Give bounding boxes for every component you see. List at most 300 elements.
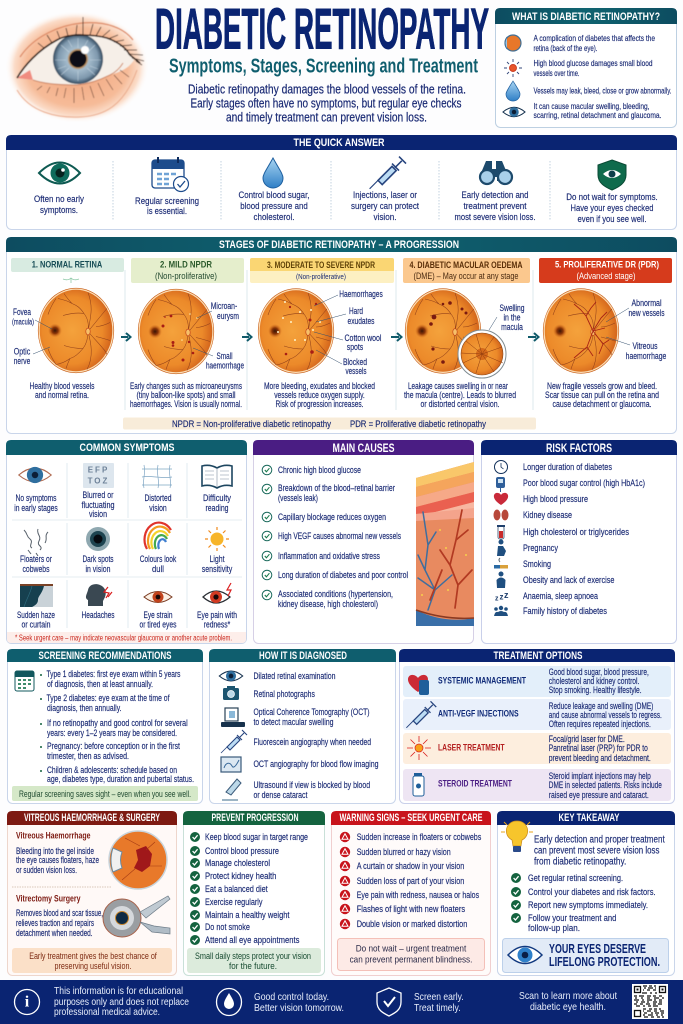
risk: pregnancy: Pregnancy <box>523 543 558 553</box>
symptom: blurred vision chart <box>82 463 115 519</box>
icon: drop <box>506 81 520 101</box>
takeaway checklist: Follow your treatment and <box>528 913 616 923</box>
panel: treatment options <box>399 649 675 804</box>
treatment: systemic management: cholesterol and kidney control. <box>549 676 639 686</box>
symptom: rainbow: dull <box>152 564 164 574</box>
urgent care note <box>7 632 246 643</box>
answer: early detection: most severe vision loss. <box>454 212 536 222</box>
warning callout <box>338 938 484 970</box>
answer: injections <box>351 157 419 222</box>
stage 3: moderate to severe NPDR: Blocked <box>343 357 367 367</box>
panel heading: SCREENING RECOMMENDATIONS <box>38 650 172 662</box>
diagnosis: dilated exam <box>219 671 336 681</box>
screening list: If no retinopathy and good control for several <box>47 718 188 728</box>
symptom: curtain <box>17 584 55 630</box>
panel: risk factors <box>481 440 677 644</box>
symptom: distorted vision grid: Distorted <box>144 493 172 503</box>
risk: family: Family history of diabetes <box>523 606 607 616</box>
answer: control blood sugar: cholesterol. <box>254 212 294 222</box>
warning callout: Do not wait – urgent treatment <box>356 944 467 954</box>
risk: heart <box>494 493 588 505</box>
takeaway checklist: Get regular retinal screening. <box>528 873 623 883</box>
panel: what is diabetic retinopathy <box>495 8 677 128</box>
stage 4: diabetic macular oedema: in the <box>504 312 521 322</box>
causes list: Long duration of diabetes and poor control <box>278 570 408 580</box>
treatment: systemic management <box>403 666 671 697</box>
symptom: light sensitivity sun: Light <box>210 554 225 564</box>
symptom: eye strain: or tired eyes <box>140 620 177 630</box>
glucose text: High blood glucose damages small blood <box>534 58 653 68</box>
prevention checklist: Exercise regularly <box>205 897 263 907</box>
prevention checklist: Do not smoke <box>205 922 250 932</box>
answer: early detection <box>454 161 536 222</box>
panel heading: KEY TAKEAWAY <box>558 812 620 824</box>
stage 1: normal retina: Optic <box>14 346 31 356</box>
warning list <box>340 832 482 929</box>
stage 1: normal retina <box>11 258 124 400</box>
stage 5: proliferative DR <box>539 258 672 409</box>
vitreous callout: Early treatment gives the best chance of <box>29 951 157 961</box>
risk: sleep: z <box>495 596 499 602</box>
urgent care note: * Seek urgent care – may indicate neovascular glaucoma or another acute problem. <box>15 634 232 642</box>
disclaimer: professional medical advice. <box>54 1006 160 1018</box>
causes list: Chronic high blood glucose <box>278 465 361 475</box>
illustration: vitrectomy instruments <box>103 896 170 937</box>
symptom: rainbow <box>140 523 177 574</box>
causes list: Capillary blockage reduces oxygen <box>278 512 386 522</box>
vitreous callout: preserving useful vision. <box>54 961 132 971</box>
risk: sleep <box>495 590 598 602</box>
symptom: dark spots <box>82 527 114 574</box>
QR code <box>632 984 668 1019</box>
risk: smoking: Smoking <box>523 559 551 569</box>
warning list: Double vision or marked distortion <box>357 919 467 929</box>
stage 2: mild NPDR: haemorrhages. Vision is usually normal. <box>130 399 242 409</box>
screening list: trimester, then as advised. <box>47 751 129 761</box>
vitreous haemorrhage text: Bleeding into the gel inside <box>16 846 94 856</box>
stage 3: moderate to severe NPDR: More bleeding, exudates and blocked <box>264 381 375 391</box>
stage 3: moderate to severe NPDR: 3. MODERATE TO SEVERE NPDR <box>267 260 375 270</box>
stage 5: proliferative DR: (Advanced stage) <box>576 271 636 281</box>
treatment: anti-VEGF injections <box>403 699 671 730</box>
disclaimer: i <box>25 994 30 1010</box>
illustration: eye with haemorrhage <box>109 831 167 889</box>
arrow <box>121 333 130 341</box>
symptom: no symptoms: No symptoms <box>16 493 57 503</box>
symptom: curtain: Sudden haze <box>17 610 55 620</box>
answer: no early symptoms: Often no early <box>34 194 85 204</box>
treatment: laser: prevent bleeding and detachment. <box>549 753 651 763</box>
stage 4: diabetic macular oedema: macula <box>501 322 523 332</box>
definition text: retina (back of the eye). <box>534 43 598 53</box>
stage 4: diabetic macular oedema: Leakage causes swelling in or near <box>408 381 508 391</box>
prevention checklist: Eat a balanced diet <box>205 884 268 894</box>
treatment: steroid: raised eye pressure and cataract. <box>549 790 649 800</box>
panel: prevent progression <box>183 811 325 976</box>
warning list: Sudden blurred or hazy vision <box>357 847 451 857</box>
good control message: Better vision tomorrow. <box>254 1002 344 1014</box>
stage 3: moderate to severe NPDR: Hard <box>349 306 363 316</box>
symptom: dark spots: in vision <box>86 564 111 574</box>
risk: sleep: Anaemia, sleep apnoea <box>523 591 598 601</box>
warning list: Eye pain with redness, nausea or halos <box>357 890 480 900</box>
stage 1: normal retina: Fovea <box>13 307 31 317</box>
risk: kidneys: Kidney disease <box>523 510 572 520</box>
treatment: anti-VEGF injections: ANTI-VEGF INJECTIONS <box>438 708 519 720</box>
disclaimer: purposes only and does not replace <box>54 996 189 1008</box>
answer: injections: vision. <box>374 212 396 222</box>
vitrectomy text: relieves traction and repairs <box>16 918 94 928</box>
panel heading: STAGES OF DIABETIC RETINOPATHY – A PROGRESSION <box>219 239 459 251</box>
stage 2: mild NPDR: Early changes such as microaneurysms <box>130 381 242 391</box>
risk: blood sugar meter: Poor blood sugar control (high HbA1c) <box>523 478 645 488</box>
prevention checklist: Control blood pressure <box>205 846 279 856</box>
risk: family <box>494 606 607 616</box>
vitreous callout <box>12 948 172 973</box>
stage 5: proliferative DR: Vitreous <box>632 341 658 351</box>
answer: early detection: treatment prevent <box>464 201 527 211</box>
lifelong protection banner <box>502 938 668 972</box>
warning callout: can prevent permanent blindness. <box>350 954 472 966</box>
answer: regular screening <box>135 157 199 216</box>
panel heading: COMMON SYMPTOMS <box>80 442 174 454</box>
stage 1: normal retina: Healthy blood vessels <box>30 381 95 391</box>
symptom: blurred vision chart: fluctuating <box>82 500 115 510</box>
icon: calendar <box>15 671 34 691</box>
answer: control blood sugar: blood pressure and <box>240 201 308 211</box>
symptom: eye pain: redness* <box>204 620 231 630</box>
prevention checklist: Keep blood sugar in target range <box>205 832 308 842</box>
risk: pregnancy <box>497 540 558 556</box>
stage 3: moderate to severe NPDR: Risk of progression increases. <box>276 399 364 409</box>
prevention callout: for the future. <box>229 961 277 971</box>
symptom: floaters <box>20 529 52 574</box>
vitreous haemorrhage text: or sudden vision loss. <box>16 865 77 875</box>
treatment: systemic management: Stop smoking. Healthy lifestyle. <box>549 685 642 695</box>
intro paragraph: and timely treatment can prevent vision loss. <box>226 110 427 124</box>
warning list: A curtain or shadow in your vision <box>357 861 464 871</box>
stage 3: moderate to severe NPDR: vessels reduce oxygen supply. <box>274 390 365 400</box>
glucose text: vessels over time. <box>534 68 580 78</box>
panel heading: VITREOUS HAEMORRHAGE & SURGERY <box>24 812 160 824</box>
stage 4: diabetic macular oedema <box>403 258 530 409</box>
icon: eye cross-section <box>505 35 521 51</box>
symptom: distorted vision grid: vision <box>149 503 167 513</box>
diagnosis: fluorescein angiography: Fluorescein angiography when needed <box>254 737 371 747</box>
answer: no early symptoms <box>34 162 85 215</box>
warning list: Sudden loss of part of your vision <box>357 876 464 886</box>
answer: early detection: Early detection and <box>462 190 529 200</box>
risk: smoking <box>494 558 551 569</box>
treatment: systemic management: SYSTEMIC MANAGEMENT <box>438 676 526 686</box>
causes list: kidney disease, high cholesterol) <box>278 599 378 609</box>
answer: control blood sugar <box>238 158 310 222</box>
prevention checklist: Protect kidney health <box>205 871 276 881</box>
complications text <box>534 101 662 120</box>
symptom: difficulty reading book <box>202 465 232 513</box>
stage 4: diabetic macular oedema: (DME) – May occur at any stage <box>414 271 519 281</box>
panel heading: RISK FACTORS <box>546 441 612 455</box>
causes list: Associated conditions (hypertension, <box>278 589 393 599</box>
stage 4: diabetic macular oedema: 4. DIABETIC MACULAR OEDEMA <box>410 260 523 270</box>
symptom: dark spots: Dark spots <box>82 554 114 564</box>
screening list: of diagnosis, then at least annually. <box>47 679 153 689</box>
symptom: blurred vision chart: TOZ <box>88 476 109 486</box>
panel heading: THE QUICK ANSWER <box>294 137 385 149</box>
panel heading: MAIN CAUSES <box>332 441 394 455</box>
arrow <box>242 333 252 341</box>
symptom: headache <box>82 584 115 620</box>
symptom: eye pain: Eye pain with <box>197 610 237 620</box>
stage 1: normal retina: (macula) <box>12 318 34 326</box>
warning list: Sudden increase in floaters or cobwebs <box>357 832 482 842</box>
answer: regular screening: is essential. <box>147 206 187 216</box>
diagnosis: OCT angiography: OCT angiography for blood flow imaging <box>254 759 379 769</box>
abbreviation legend: NPDR = Non-proliferative diabetic retinopathy <box>172 419 331 429</box>
treatment: laser <box>403 733 671 764</box>
answer: no early symptoms: symptoms. <box>40 205 78 215</box>
diagnosis: OCT: Optical Coherence Tomography (OCT) <box>254 707 370 717</box>
takeaway checklist: Report new symptoms immediately. <box>528 900 648 910</box>
intro paragraph: Early stages often have no symptoms, but regular eye checks <box>190 96 462 110</box>
stage 4: diabetic macular oedema: or distorted central vision. <box>420 399 500 409</box>
prevention checklist: Maintain a healthy weight <box>205 910 290 920</box>
stage 2: mild NPDR: Microan- <box>211 301 237 311</box>
prevention callout <box>187 948 321 973</box>
stage 3: moderate to severe NPDR <box>250 258 394 409</box>
diagnosis: dilated exam: Dilated retinal examination <box>254 671 336 681</box>
symptom: blurred vision chart: Blurred or <box>82 490 114 500</box>
symptom: no symptoms: in early stages <box>14 503 58 513</box>
treatment: anti-VEGF injections: Often requires repeated injections. <box>549 719 651 729</box>
scan message: diabetic eye health. <box>530 1001 606 1013</box>
symptom: blurred vision chart: vision <box>89 509 107 519</box>
risk: kidneys <box>494 510 572 520</box>
answer: injections: surgery can protect <box>351 201 419 211</box>
causes list: High VEGF causes abnormal new vessels <box>278 531 401 541</box>
symptom: blurred vision chart: EFP <box>88 466 109 474</box>
treatment: laser: LASER TREATMENT <box>438 742 505 754</box>
prevention checklist: Attend all eye appointments <box>205 935 300 945</box>
icon: eye <box>503 107 525 117</box>
diagnosis: retinal photographs <box>223 686 315 700</box>
stage 1: normal retina: and normal retina. <box>35 390 89 400</box>
symptom: light sensitivity sun: sensitivity <box>202 564 233 574</box>
intro paragraph: Diabetic retinopathy damages the blood vessels of the retina. <box>188 82 466 96</box>
risk: duration clock: Longer duration of diabetes <box>523 462 612 472</box>
causes list: (vessels leak) <box>278 493 318 503</box>
answer: do not wait: Do not wait for symptoms. <box>566 192 658 202</box>
prevention checklist <box>190 832 308 945</box>
stage 3: moderate to severe NPDR: Cotton wool <box>344 333 382 343</box>
diagnosis: ultrasound <box>222 779 370 800</box>
symptom: eye pain <box>197 583 237 630</box>
screening list: Type 2 diabetes: eye exam at the time of <box>46 693 170 703</box>
screening list: Type 1 diabetes: first eye exam within 5 years <box>46 669 181 679</box>
takeaway statement <box>534 834 665 868</box>
screen early message: Treat timely. <box>414 1002 461 1014</box>
takeaway checklist <box>511 873 656 933</box>
symptom: no symptoms <box>14 467 58 513</box>
diagnosis: fluorescein angiography <box>221 730 371 753</box>
definition text <box>534 33 655 53</box>
vitrectomy text: Vitrectomy Surgery <box>16 892 81 904</box>
stage 3: moderate to severe NPDR: exudates <box>348 316 375 326</box>
stage 5: proliferative DR: Abnormal <box>632 298 662 308</box>
screen early message <box>377 988 464 1016</box>
answer: injections: Injections, laser or <box>353 190 417 200</box>
stage 2: mild NPDR: (tiny balloon-like spots) and small <box>136 390 236 400</box>
illustration: retinal tissue layers and vessels <box>416 462 474 626</box>
prevention checklist: Manage cholesterol <box>205 858 270 868</box>
answer: do not wait: Have your eyes checked <box>570 203 654 213</box>
screening list: age, diabetes type, duration and pubertal status. <box>47 774 194 784</box>
stage 4: diabetic macular oedema: Swelling <box>500 303 525 313</box>
treatment: steroid <box>403 769 671 801</box>
vitrectomy text: detachment when needed. <box>16 928 93 938</box>
arrow <box>391 333 402 341</box>
screening list: years: every 1–2 years may be considered. <box>47 728 177 738</box>
causes list: Breakdown of the blood–retinal barrier <box>278 483 395 493</box>
risk: test tube: High cholesterol or triglycerides <box>523 527 629 537</box>
answer: do not wait: even if you see well. <box>578 214 646 224</box>
causes list <box>262 465 408 609</box>
panel: the quick answer <box>6 135 677 230</box>
diagnosis: OCT: to detect macular swelling <box>254 717 334 727</box>
screening list: Pregnancy: before conception or in the first <box>47 741 180 751</box>
stage 2: mild NPDR: (Non-proliferative) <box>155 271 217 281</box>
panel: stages of diabetic retinopathy <box>6 237 677 434</box>
disclaimer: This information is for educational <box>54 985 183 997</box>
intro paragraph <box>188 82 466 124</box>
stage 1: normal retina: 1. NORMAL RETINA <box>32 260 102 270</box>
takeaway statement: from diabetic retinopathy. <box>534 856 626 868</box>
stage 2: mild NPDR: 2. MILD NPDR <box>160 260 212 270</box>
panel heading: TREATMENT OPTIONS <box>494 650 582 662</box>
symptom: rainbow: Colours look <box>140 554 177 564</box>
symptom: difficulty reading book: Difficulty <box>203 493 231 503</box>
risk: obesity: Obesity and lack of exercise <box>523 575 615 585</box>
panel: main causes <box>253 440 474 644</box>
abbreviation legend: PDR = Proliferative diabetic retinopathy <box>350 419 486 429</box>
symptom: difficulty reading book: reading <box>206 503 229 513</box>
diagnosis: OCT <box>221 707 370 727</box>
stage 3: moderate to severe NPDR: spots <box>347 342 364 352</box>
symptom: floaters: Floaters or <box>20 554 52 564</box>
lifelong protection banner: YOUR EYES DESERVE <box>549 942 646 956</box>
panel: how it is diagnosed <box>209 649 396 804</box>
screening callout: Regular screening saves sight – even when you see well. <box>19 789 191 799</box>
risk: duration clock <box>494 460 612 474</box>
footer band <box>0 980 683 1024</box>
diagnosis: ultrasound: or dense cataract <box>254 790 308 800</box>
good control message <box>216 988 344 1016</box>
scan message: Scan to learn more about <box>519 990 617 1002</box>
warning list: Flashes of light with new floaters <box>357 904 466 914</box>
takeaway checklist: Control your diabetes and risk factors. <box>528 887 656 897</box>
answer: regular screening: Regular screening <box>135 196 199 206</box>
risk: sleep: z <box>500 592 504 602</box>
vitreous haemorrhage text <box>16 830 99 875</box>
risk: test tube <box>497 525 629 539</box>
abbreviation legend <box>123 418 536 430</box>
takeaway checklist: follow-up plan. <box>528 923 580 933</box>
symptom: eye strain <box>140 592 177 630</box>
stage 5: proliferative DR: new vessels <box>628 308 665 318</box>
diagnosis: retinal photographs: Retinal photographs <box>254 689 315 699</box>
vitreous haemorrhage text: the eye causes floaters, haze <box>16 855 99 865</box>
treatment: laser: Focal/grid laser for DME. <box>549 734 625 744</box>
screening list: diagnosis, then annually. <box>47 703 122 713</box>
symptom: eye strain: Eye strain <box>144 610 173 620</box>
stage 2: mild NPDR: haemorrhage <box>206 360 244 370</box>
screen early message: Screen early. <box>414 991 464 1003</box>
stage 2: mild NPDR: eurysm <box>217 311 239 321</box>
risk: obesity <box>496 572 615 588</box>
hero eye illustration <box>5 11 149 123</box>
panel: warning signs <box>331 811 491 976</box>
panel heading: PREVENT PROGRESSION <box>212 812 299 824</box>
answer: do not wait <box>566 160 658 224</box>
treatment: laser: Panretinal laser (PRP) for PDR to <box>549 743 648 753</box>
screening list: Children & adolescents: schedule based on <box>47 765 177 775</box>
scan message <box>519 990 617 1013</box>
panel: screening recommendations <box>7 649 203 804</box>
stage 5: proliferative DR: 5. PROLIFERATIVE DR (PDR) <box>555 260 659 270</box>
screening callout <box>12 786 198 801</box>
symptom: floaters: cobwebs <box>22 564 50 574</box>
disclaimer <box>14 985 189 1018</box>
screening list <box>40 669 194 784</box>
icon: light bulb <box>501 821 533 852</box>
panel heading: WARNING SIGNS – SEEK URGENT CARE <box>340 812 482 824</box>
vitrectomy text: Removes blood and scar tissue, <box>16 908 103 918</box>
panel: key takeaway <box>497 811 675 976</box>
panel: vitreous haemorrhage and surgery <box>7 811 177 976</box>
symptom: light sensitivity sun <box>202 527 233 574</box>
panel: common symptoms <box>6 440 247 644</box>
good control message: Good control today. <box>254 991 329 1003</box>
icon: damaged vessel burst <box>504 59 522 77</box>
treatment: steroid: STEROID TREATMENT <box>438 778 512 790</box>
definition text: A complication of diabetes that affects the <box>534 33 655 43</box>
panel heading: HOW IT IS DIAGNOSED <box>259 650 347 662</box>
answer: control blood sugar: Control blood sugar, <box>238 190 310 200</box>
risk: sleep: z <box>504 590 509 600</box>
treatment: systemic management: Good blood sugar, blood pressure, <box>549 667 649 677</box>
stage 1: normal retina: nerve <box>14 356 30 366</box>
symptom: headache: Headaches <box>82 610 115 620</box>
stage 3: moderate to severe NPDR: (Non-proliferative) <box>296 272 346 281</box>
causes list: Inflammation and oxidative stress <box>278 551 380 561</box>
stage 5: proliferative DR: haemorrhage <box>626 351 666 361</box>
complications text: It can cause macular swelling, bleeding, <box>534 101 650 111</box>
diagnosis: ultrasound: Ultrasound if view is blocked by blood <box>254 780 370 790</box>
stage 2: mild NPDR: Small <box>216 351 233 361</box>
vitreous haemorrhage text: Vitreous Haemorrhage <box>16 830 90 840</box>
stage 4: diabetic macular oedema: the macula (centre). Leads to blurred <box>404 390 516 400</box>
risk: blood sugar meter <box>496 477 645 492</box>
symptom: distorted vision grid <box>142 465 172 513</box>
diagnosis: OCT angiography <box>221 757 379 772</box>
prevention callout: Small daily steps protect your vision <box>195 951 311 961</box>
subtitle: Symptoms, Stages, Screening and Treatment <box>169 56 478 78</box>
glucose text <box>534 58 653 78</box>
stage 5: proliferative DR: cause detachment or glaucoma. <box>552 399 652 409</box>
stage 2: mild NPDR <box>130 258 244 409</box>
arrow <box>528 333 538 341</box>
stage 3: moderate to severe NPDR: Haemorrhages <box>339 289 383 299</box>
